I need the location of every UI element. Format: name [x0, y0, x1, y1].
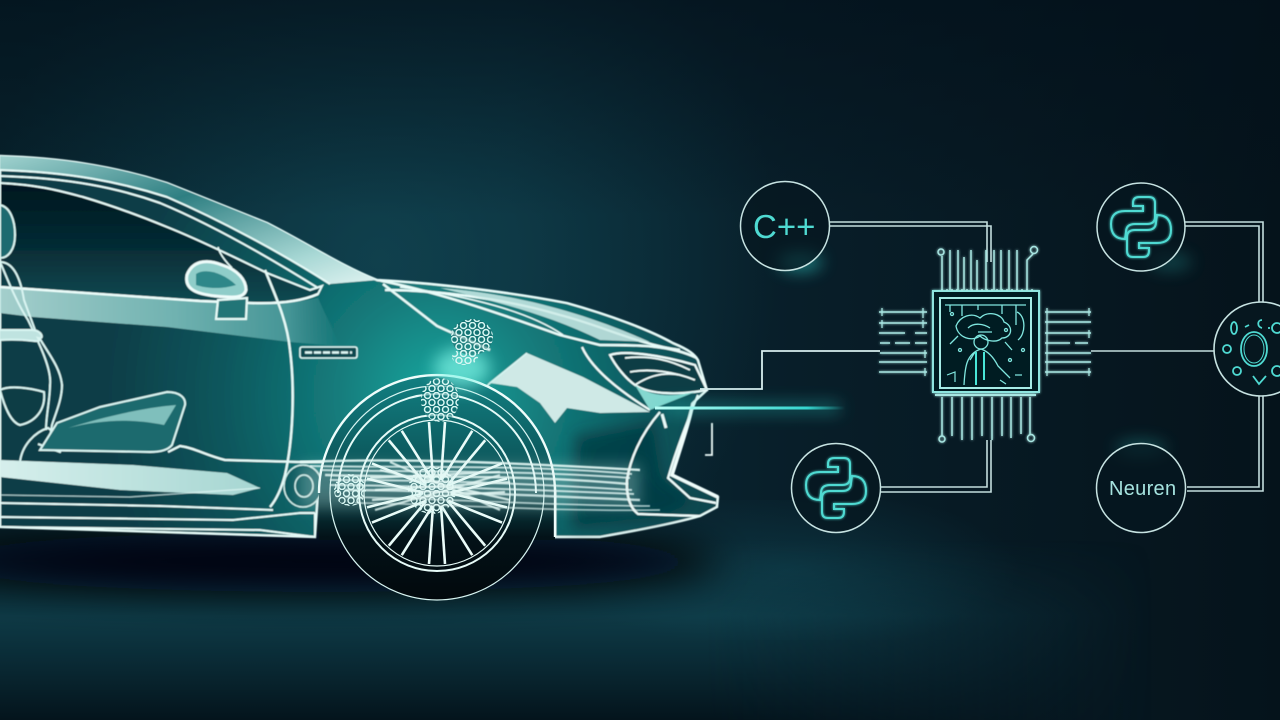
hood highlights	[377, 280, 697, 358]
connector lines	[700, 222, 1263, 492]
front shade	[572, 422, 695, 530]
front bumper	[627, 395, 718, 516]
side window	[0, 183, 322, 303]
door edge	[265, 270, 293, 507]
chip right pins	[1045, 308, 1091, 376]
label: Neuren: Neuren	[1109, 478, 1176, 500]
line: chip to gear	[1091, 350, 1214, 352]
front wheel	[319, 375, 555, 600]
label: C++: C++	[753, 208, 815, 245]
small rear mesh cluster	[334, 474, 366, 506]
circle node: Neuren	[1096, 440, 1186, 532]
car ground shadow	[0, 532, 720, 592]
nanoparticle lower	[421, 378, 459, 422]
chip left pins	[879, 308, 927, 376]
spokes	[367, 422, 507, 564]
chip top pins	[938, 246, 1038, 290]
driver seat	[0, 205, 185, 462]
rocker panel lines	[0, 488, 315, 537]
icon: Python logo	[806, 458, 866, 518]
line: Python bottom to chip	[881, 440, 991, 492]
nanoparticle upper	[451, 319, 493, 365]
roof pillar	[0, 156, 377, 284]
belt line band	[0, 287, 340, 346]
chip bottom pins	[935, 395, 1036, 442]
line: gear to Neuren	[1187, 396, 1263, 491]
car body	[0, 156, 718, 537]
teal beam	[655, 403, 845, 413]
line: car to chip	[700, 351, 880, 389]
rim	[359, 415, 515, 571]
hub mesh	[408, 466, 456, 514]
line: Python top to gear	[1185, 222, 1263, 303]
roof rail lines	[0, 170, 330, 288]
chip brain circuit	[945, 305, 1026, 385]
seat headrest	[0, 205, 15, 258]
circle node: gear	[1214, 302, 1280, 396]
door sill	[0, 460, 260, 495]
fender sheen	[490, 353, 650, 423]
circle node: Python bottom	[792, 444, 880, 532]
circle node: C++	[740, 182, 830, 272]
light streak across underbody	[300, 460, 660, 510]
nanoparticle glow	[434, 348, 490, 388]
icon: gear ring with dots	[1223, 320, 1280, 384]
car	[0, 156, 718, 537]
icon: Python logo	[1111, 197, 1171, 257]
chip package	[933, 291, 1039, 392]
seat cushion	[40, 392, 185, 452]
line: C++ to chip	[830, 222, 991, 262]
rear hub	[284, 465, 322, 507]
headlight	[582, 347, 707, 410]
tyre	[330, 386, 544, 600]
hood panel light	[440, 288, 650, 342]
door badge	[300, 347, 357, 358]
side mirror	[187, 247, 247, 319]
circle node: Python top	[1097, 183, 1192, 271]
microchip	[879, 246, 1091, 442]
